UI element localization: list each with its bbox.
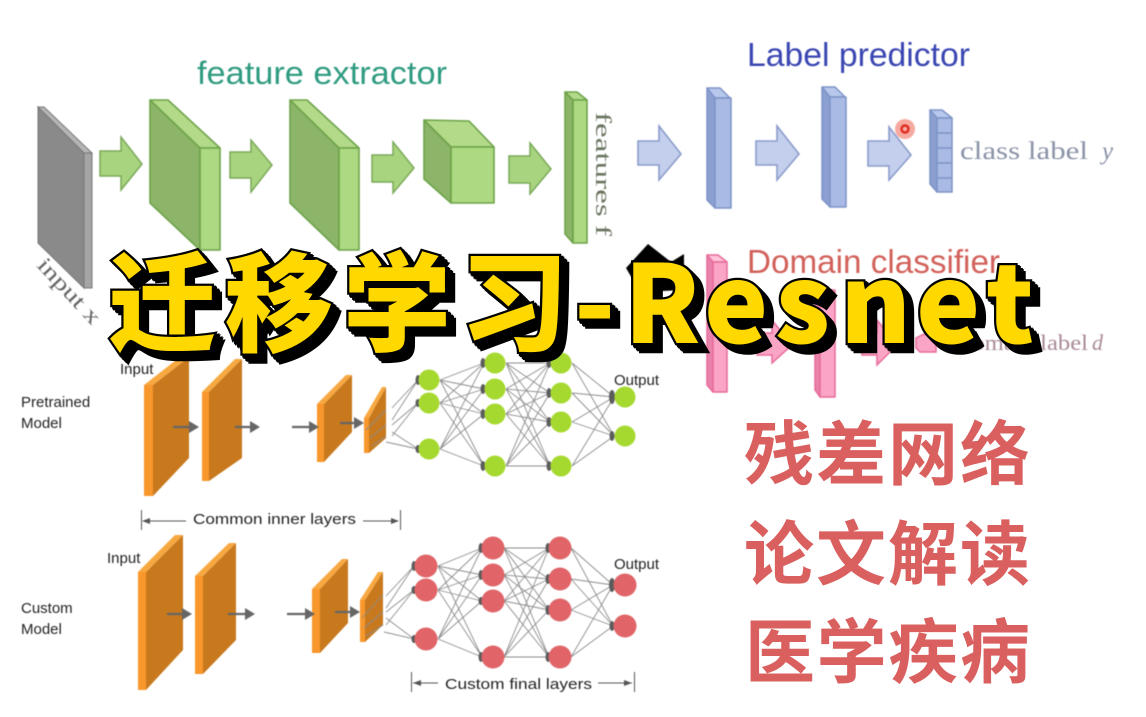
title: 迁移学习-Resnet: [108, 219, 1034, 375]
diagram: pretrained model: [21, 352, 660, 530]
conv layers: [138, 535, 383, 690]
arrow: pink 1: [757, 320, 792, 363]
diagram: custom model: [21, 535, 660, 693]
heading: domain classifier: Domain classifier: [747, 243, 1000, 280]
label: custom model: Custom: [21, 600, 73, 617]
subtitle: line 2: 论文解读: [744, 516, 1030, 594]
pink bar 1: [707, 255, 727, 392]
label: class label y: class label: [960, 138, 1088, 165]
label: features f: features f: [591, 112, 616, 237]
label: domain label d: d: [1092, 330, 1104, 355]
bracket: common inner layers: [142, 510, 400, 530]
arrow: blue 3: [868, 127, 911, 180]
bracket: custom final layers: [412, 672, 634, 693]
subtitle: line 3: 医学疾病: [745, 614, 1030, 692]
cursor highlight dot: [895, 119, 915, 139]
flow arrows: [167, 606, 360, 620]
subtitle block: [744, 416, 1030, 692]
input slab: [38, 107, 92, 288]
green slab 2: [290, 100, 359, 250]
connections: [362, 548, 613, 657]
arrowheads at nodes: [412, 543, 615, 662]
label: input: Input: [120, 361, 154, 378]
flow arrows: [173, 417, 364, 433]
label: class label y: y: [1099, 138, 1114, 165]
arrow: blue 2: [756, 126, 799, 180]
label: input: Input: [107, 550, 141, 567]
green slab 1: [150, 100, 220, 250]
label: custom model: Model: [21, 621, 62, 638]
blue bar 2: [822, 87, 846, 207]
label: pretrained model: Model: [21, 415, 62, 432]
heading: feature extractor: feature extractor: [197, 55, 447, 91]
arrow: pink 2: [862, 320, 897, 365]
bracket: common inner layers: Common inner layers: [193, 511, 356, 528]
pink cube: [916, 334, 936, 352]
subtitle: line 1: 残差网络: [744, 416, 1030, 494]
arrow: green 3: [372, 142, 414, 193]
green nodes: [418, 352, 636, 476]
conv layers: [144, 357, 386, 496]
label: pretrained model: Pretrained: [21, 394, 90, 411]
pink bar 2: [815, 290, 835, 397]
label: output: Output: [614, 372, 660, 389]
black arrow behind title: [626, 244, 684, 292]
blue bar 1: [707, 88, 731, 208]
label: custom model: [21, 600, 73, 638]
blue output bar with cells: [930, 110, 952, 192]
connections: [366, 363, 614, 466]
label: domain label d: domain label: [960, 330, 1088, 355]
arrow: green 2: [230, 140, 272, 192]
red nodes: [414, 536, 636, 668]
arrowheads at nodes: [416, 358, 615, 471]
arrow: green 4: [509, 143, 551, 194]
label: input x: input x: [32, 252, 107, 329]
arrow: blue 1: [638, 126, 681, 180]
green feature bar: [565, 92, 587, 243]
diagram: domain adaptation network: [32, 36, 1114, 397]
label: pretrained model: [21, 394, 90, 432]
bracket: custom final layers: Custom final layers: [445, 676, 592, 693]
label: output: Output: [614, 556, 660, 573]
green cube: [424, 120, 494, 203]
heading: label predictor: Label predictor: [747, 36, 970, 73]
arrow: green 1: [100, 137, 142, 190]
